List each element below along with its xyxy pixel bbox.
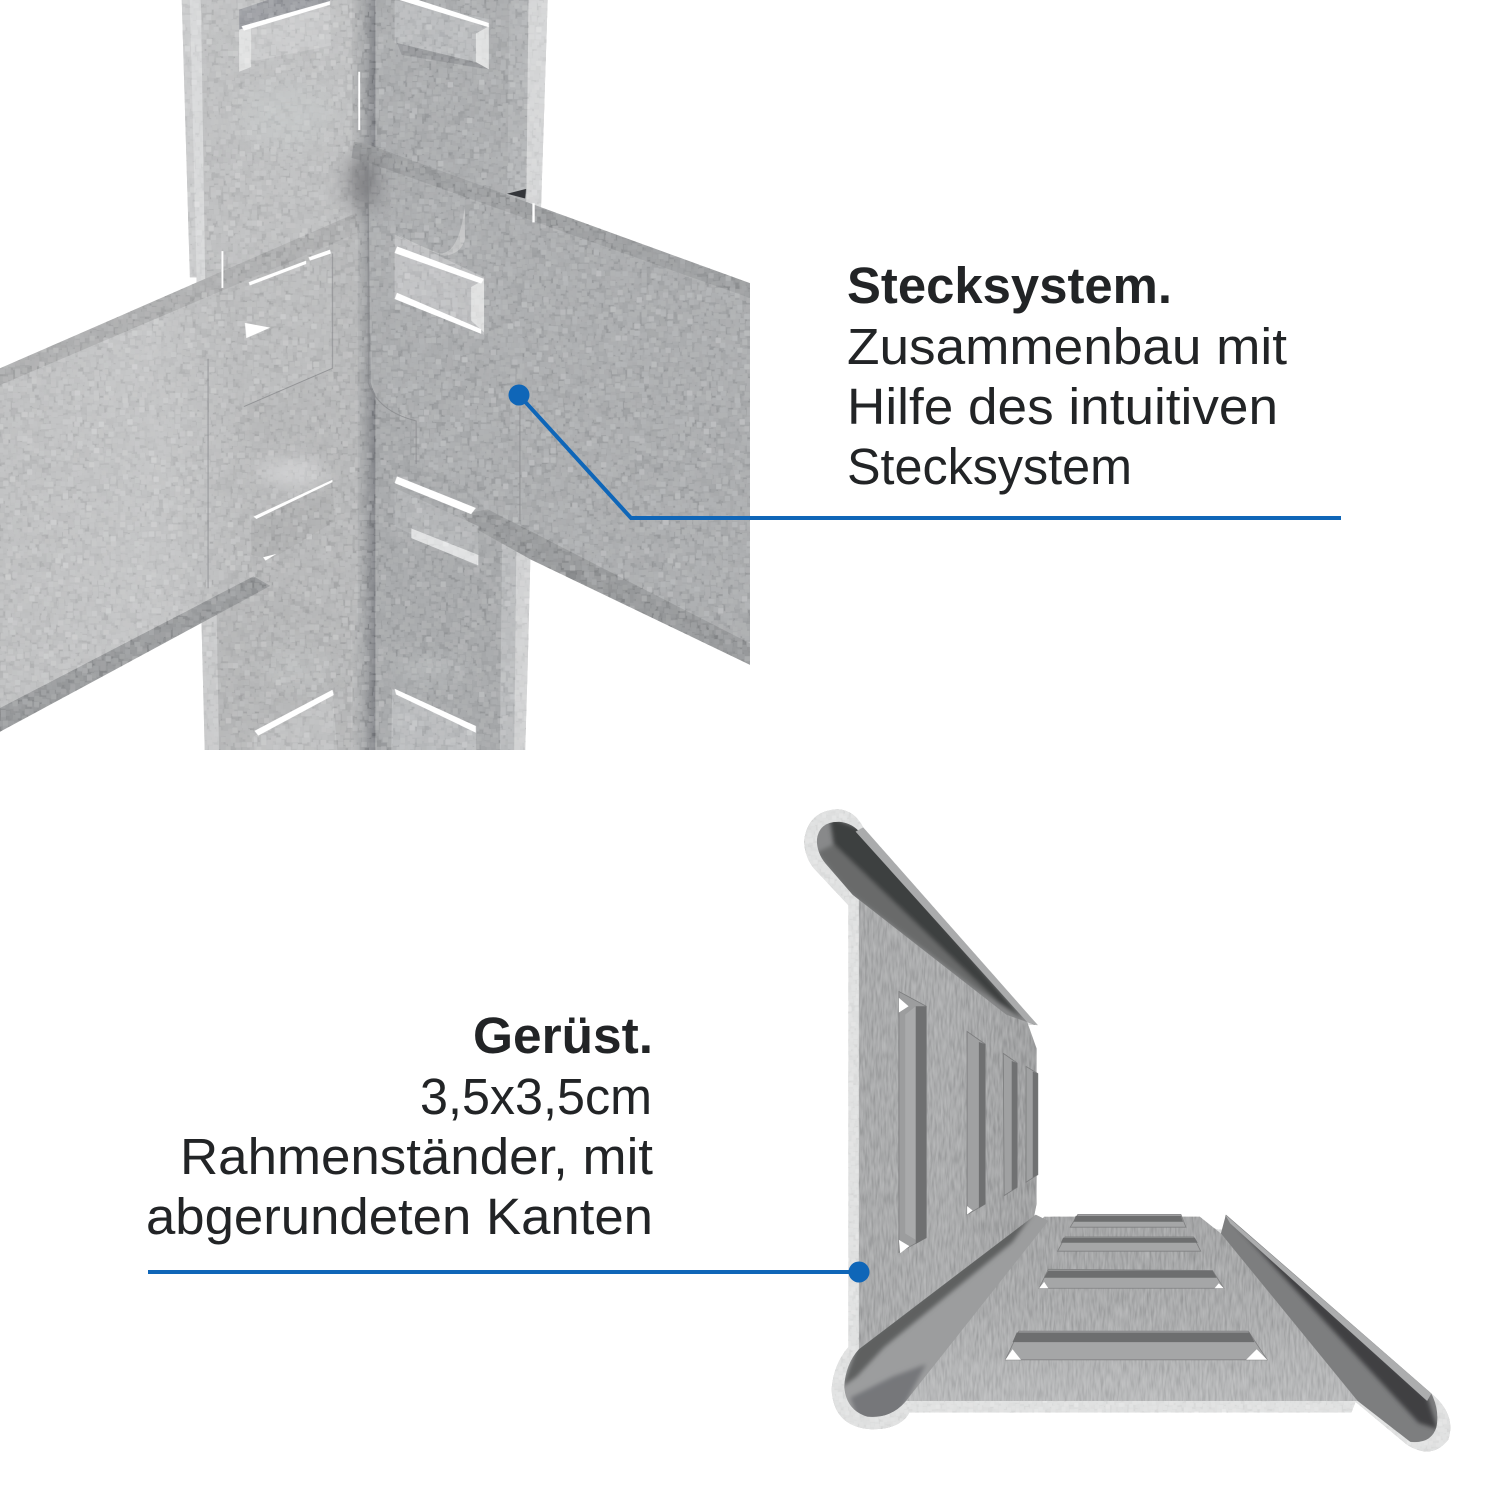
text block: Gerüst xyxy=(146,1007,653,1245)
right beam top edge xyxy=(352,142,750,300)
left beam face xyxy=(0,278,253,708)
left beam top edge xyxy=(0,213,358,385)
bottom slots xyxy=(253,689,476,750)
left beam lower edge xyxy=(0,576,270,732)
text block: Gerüst: Gerüst. xyxy=(473,1007,653,1064)
panel: frame profile illustration xyxy=(800,800,1450,1451)
lighting on metal xyxy=(244,86,464,682)
text block: Stecksystem xyxy=(847,257,1287,495)
left tab xyxy=(244,253,332,407)
dark gap shadow xyxy=(507,189,526,198)
right beam face xyxy=(368,163,750,646)
wall slots xyxy=(899,992,1038,1252)
upper slots in post xyxy=(239,0,489,72)
right slot upper xyxy=(395,206,484,335)
text block: Gerüst: 3,5x3,5cm xyxy=(420,1068,652,1125)
post flanges and webs xyxy=(182,0,548,750)
left side post area behind tabs xyxy=(242,232,358,622)
plate outline xyxy=(208,163,520,588)
panel: shelf joint photo illustration xyxy=(0,0,750,750)
text block: Gerüst: Rahmenständer, mit xyxy=(180,1128,653,1185)
callout: Stecksystem leader line xyxy=(508,384,1341,518)
lower channel xyxy=(844,1214,1047,1417)
floor slots xyxy=(1005,1215,1267,1360)
lower left tab xyxy=(251,481,335,560)
right channel xyxy=(1217,1212,1444,1448)
wall panel xyxy=(859,884,1037,1364)
text block: Gerüst: abgerundeten Kanten xyxy=(146,1188,653,1245)
metal parts: post and beams xyxy=(0,0,750,750)
profile surfaces xyxy=(859,884,1358,1401)
callout: Gerüst leader line xyxy=(148,1262,870,1282)
text block: Stecksystem: Stecksystem xyxy=(847,438,1132,495)
profile cut rim xyxy=(804,809,1450,1451)
slot cutout highlights xyxy=(899,998,1267,1360)
highlights and cutouts xyxy=(221,0,535,736)
text block: Stecksystem: Stecksystem. xyxy=(847,257,1172,314)
right beam lower edge xyxy=(462,509,750,665)
top flange strip xyxy=(856,827,1038,1025)
text block: Stecksystem: Hilfe des intuitiven xyxy=(847,378,1278,435)
right slot lower xyxy=(395,488,478,567)
floor panel xyxy=(905,1217,1358,1401)
top channel xyxy=(816,822,1036,1025)
text block: Stecksystem: Zusammenbau mit xyxy=(847,318,1287,375)
